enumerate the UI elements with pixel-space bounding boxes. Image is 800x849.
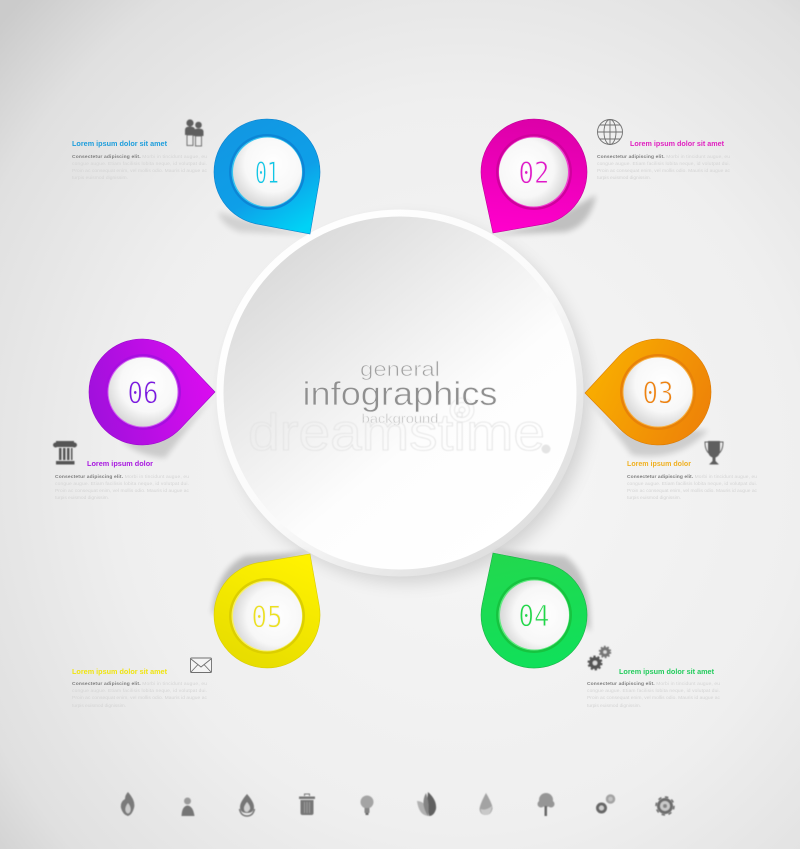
text block 06: turpis euismod dignissim. [55,495,109,501]
pin 02 [481,119,596,235]
text block 01: congue augue. Etiam facilisis lobita neque, id volutpat dui. [72,161,207,167]
text block 06: Consectetur adipiscing elit. Morbi in tincidunt augue, eu [55,474,189,480]
center title [302,359,498,426]
text block 03 [627,459,758,501]
text block 05: Lorem ipsum dolor sit amet [72,667,167,676]
text block 04: Lorem ipsum dolor sit amet [619,667,714,676]
text block 01: Consectetur adipiscing elit. Morbi in tincidunt augue, eu [72,154,207,160]
text block 03: Lorem ipsum dolor [627,459,691,468]
center title: background [362,411,438,426]
text block 04: Proin ac consequat enim, vel mollis odio. Mauris id augue ac [587,695,721,701]
pin 03 [585,339,711,456]
number 02: 02 [518,156,550,190]
icon: globe [598,120,622,144]
icon: envelope [190,658,212,672]
icon: leaves [417,792,436,816]
text block 03: turpis euismod dignissim. [627,495,681,501]
text block 04: Consectetur adipiscing elit. Morbi in tincidunt augue, eu [587,681,720,687]
text block 02: Proin ac consequat enim, vel mollis odio. Mauris id augue ac [597,168,731,174]
text block 02 [597,139,731,181]
number 03: 03 [642,376,674,410]
icon: gears small [598,796,614,812]
text block 01: Lorem ipsum dolor sit amet [72,139,167,148]
watermark: dreamstime [248,404,545,462]
text block 05 [72,667,208,709]
text block 05: Proin ac consequat enim, vel mollis odio. Mauris id augue ac [72,695,208,701]
text block 06: congue augue. Etiam facilisis lobita neque, id volutpat dui. [55,481,189,487]
icon: gears [589,647,610,669]
icon: people [185,119,204,146]
pin 04 [481,551,590,668]
center title: infographics [302,375,498,412]
text block 03: Proin ac consequat enim, vel mollis odio. Mauris id augue ac [627,488,758,494]
number 05: 05 [252,600,282,634]
text block 05: Consectetur adipiscing elit. Morbi in tincidunt augue, eu [72,681,207,687]
icon: flame [121,792,134,816]
text block 04 [587,667,721,709]
icon: flame drop [240,794,254,816]
pin 05 [212,552,320,668]
number 06: 06 [128,376,158,410]
text block 01 [72,139,208,181]
bottom icon row [121,792,674,816]
text block 05: congue augue. Etiam facilisis lobita neque, id volutpat dui. [72,688,207,694]
number 04: 04 [518,599,550,633]
icon: cog [656,797,674,815]
text block 06: Proin ac consequat enim, vel mollis odio. Mauris id augue ac [55,488,190,494]
text block 01: turpis euismod dignissim. [72,175,128,181]
text block 03: congue augue. Etiam facilisis lobita neque, id volutpat dui. [627,481,757,487]
text block 02: Consectetur adipiscing elit. Morbi in tincidunt augue, eu [597,154,730,160]
text block 04: turpis euismod dignissim. [587,703,641,709]
text block 02: congue augue. Etiam facilisis lobita neque, id volutpat dui. [597,161,730,167]
icon: trophy [705,441,723,464]
icon: light bulb [360,796,374,815]
icon: temple [53,441,77,464]
icon: person [182,798,194,816]
text block 04: congue augue. Etiam facilisis lobita neque, id volutpat dui. [587,688,720,694]
central disc [216,210,588,582]
text block 06: Lorem ipsum dolor [87,459,153,468]
pin 06 [89,339,215,458]
text block 01: Proin ac consequat enim, vel mollis odio. Mauris id augue ac [72,168,208,174]
number 01: 01 [255,156,279,190]
text block 02: Lorem ipsum dolor sit amet [630,139,724,148]
icon: tree [538,793,554,816]
center title: general [360,359,440,381]
text block 02: turpis euismod dignissim. [597,175,651,181]
text block 06 [55,459,190,501]
text block 05: turpis euismod dignissim. [72,703,126,709]
text block 03: Consectetur adipiscing elit. Morbi in tincidunt augue, eu [627,474,757,480]
icon: trash can [299,794,315,815]
pin 01 [214,119,320,235]
icon: water drop [480,793,493,815]
